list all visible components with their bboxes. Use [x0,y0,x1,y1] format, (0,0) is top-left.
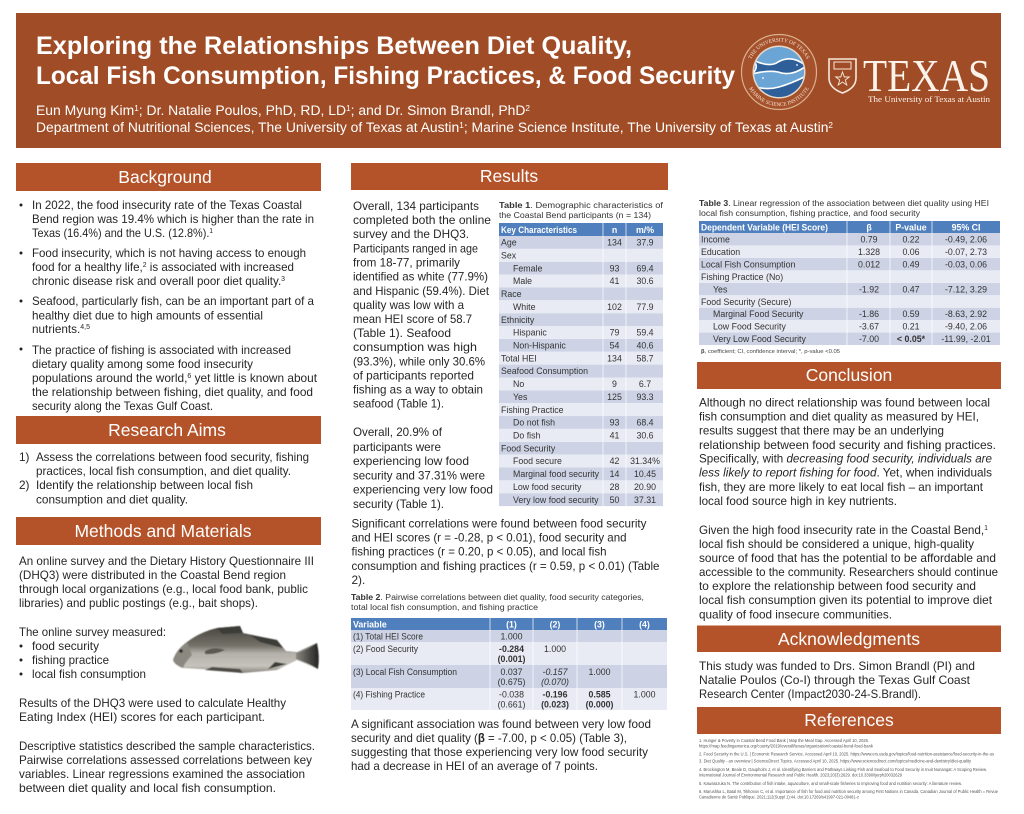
table 1: demographics: m/% [636,225,654,235]
table 3: linear regression: β [866,222,872,232]
heading: acknowledgments: Acknowledgments [778,629,920,649]
panel: references [697,707,1001,800]
table 2: pairwise correlations: -0.196 [543,690,568,700]
bullet list: background: Seafood, particularly fish, can be an important part of a [32,294,314,308]
bullet list: background: Food insecurity, which is not having access to enough [32,246,306,260]
bullet list: background: 3 [281,276,285,283]
text: participants summary: (93.3%), while only 30.6% [353,354,485,368]
text: conclusion paragraph 2: local fish consumption given its potential to improve diet [699,593,993,607]
table 3: linear regression: Yes [713,284,728,294]
list: survey measures: The online survey measured: [19,625,166,639]
table 3: linear regression: -7.12, 3.29 [945,284,987,294]
list: references: 5. Kawarazuka N. The contribution of fish intake, aquaculture, and small-scale fisheries to improving food and nutrition security: A literature review. [699,781,962,786]
bullet list: background: 4,5 [80,324,90,331]
text: funding: Natalie Poulos (Co-I) through the Texas Gulf Coast [699,673,971,687]
text: conclusion paragraph 2: source of food that has the potential to be affordable and [699,551,996,565]
text: conclusion paragraph 1: Although no direct relationship was found between local [699,396,990,410]
text: participants summary: fishing as a way to obtain [353,382,483,396]
table 3: linear regression: -0.03, 0.06 [945,259,987,269]
text: conclusion paragraph 1: relationship between food security and fishing practices. [699,438,996,452]
authors and affiliations: Eun Myung Kim [36,103,131,118]
text: significant association: security and diet quality (β = -7.00, p < 0.05) (Table 3), [351,731,627,745]
table 1: demographics: 68.4 [636,418,654,428]
bullet list: background: is associated with increased [147,260,294,274]
table 2: pairwise correlations [351,592,667,710]
bullet list: background: 1 [209,228,213,235]
table 1: demographics: 134 [607,353,622,363]
text: conclusion paragraph 2: Given the high food insecurity rate in the Coastal Bend, [699,523,988,537]
heading: background: Background [118,167,212,187]
text: participants summary: and Hispanic (59.4%). Diet [353,284,490,298]
text: significant association: A significant association was found between very low food [351,717,651,731]
table 1: demographics: Do not fish [513,418,555,428]
table 2: pairwise correlations: (1) [506,620,517,630]
table 1: demographics: 59.4 [636,328,654,338]
authors and affiliations [36,103,834,135]
table 2: pairwise correlations: (0.661) [498,700,526,710]
text: analysis: Descriptive statistics described the sample characteristics. [19,739,315,753]
table 1: demographics: Total HEI [501,353,537,363]
panel: methods and materials [16,517,321,795]
table 1: demographics: the Coastal Bend participants (n = 134) [499,210,651,220]
table 1: demographics: Seafood Consumption [501,366,588,376]
table 1: demographics: Food secure [513,456,562,466]
text: participants summary [353,199,493,511]
table 1: demographics: White [513,302,536,312]
title: Local Fish Consumption, Fishing Practices, & Food Security [36,62,735,90]
list: references: 2. Food Security in the U.S. | Economic Research Service. Accessed April 10, 2025. https://www.ers.usda.gov/topics/food-nutrition-assistance/food-security-in-the-us [699,752,995,756]
table 1: demographics: Low food security [513,482,582,492]
numbered list: aims [19,450,309,506]
text: participants summary: survey and the DHQ3. [353,227,469,241]
panel: conclusion [697,362,1001,622]
text: conclusion paragraph 2: 1 [984,525,988,532]
table 2: pairwise correlations: 0.585 [588,690,611,700]
table 1: demographics: 10.45 [634,469,656,479]
authors and affiliations: 1 [459,121,464,130]
panel: acknowledgments [697,626,1001,701]
text: funding: Research Center (Impact2030-24-S.Brandl). [699,687,921,701]
table 1: demographics: No [513,379,524,389]
table 1: demographics: 93.3 [636,392,654,402]
bullet list: background: chronic disease risk and overall poor diet quality. [32,274,286,288]
authors and affiliations: Department of Nutritional Sciences, The University of Texas at Austin [36,120,447,135]
table 1: demographics: Sex [501,250,517,260]
heading: results: Results [480,166,538,186]
text: significant association [351,717,651,773]
bullet list: background: nutrients. [32,322,81,336]
table 3: linear regression: 0.47 [902,284,920,294]
table 3: linear regression: -0.07, 2.73 [945,247,987,257]
table 2: pairwise correlations: (2) [550,620,560,630]
table 1: demographics: Race [501,289,522,299]
list: survey measures: food security [32,639,99,653]
text: significant correlations: consumption and fishing practices (r = 0.59, p < 0.01) (Table [352,559,660,573]
table 1: demographics: 37.9 [636,238,654,248]
list: references: 3. Diet Quality - an overview | ScienceDirect Topics. Accessed April 10, 2025. https://www.sciencedirect.com/topics/medicine-and-dentistry/diet-quality [699,758,972,764]
table 2: pairwise correlations: -0.157 [543,667,569,677]
authors and affiliations: 1 [134,104,139,113]
authors and affiliations: ; and Dr. Simon Brandl, PhD [351,103,526,118]
wordmark: Texas: TEXAS [863,50,990,101]
table 1: demographics: Age [501,238,517,248]
table 1: demographics: Yes [513,392,528,402]
text: participants summary: seafood (Table 1). [353,396,444,410]
table 2: pairwise correlations: (1) Total HEI Score [353,632,423,642]
list: references: 4. Brockington M, Beale D, Gaupholm J, et al. Identifying Barriers and Pathways Linking Fish and Seafood to Food Security in Inuit Nunangat: A Scoping Review. [699,767,987,772]
table 1: demographics: Marginal food security [513,469,600,479]
text: participants summary: Overall, 20.9% of [353,425,443,439]
text: conclusion paragraph 2: to explore the relationship between food security and [699,579,976,593]
wordmark: Texas: The University of Texas at Austin [868,95,991,104]
text: participants summary: quality was low with a [353,298,464,312]
text: HEI: Eating Index (HEI) scores for each participant. [19,710,265,724]
table 1: demographics: 30.6 [636,430,654,440]
table 2: pairwise correlations: (0.023) [541,700,569,710]
bullet list: background: food for a healthy life, [32,260,145,274]
numbered list: aims: Assess the correlations between food security, fishing [36,450,309,464]
list: references: https://map.feedingamerica.org/county/2019/overall/texas/organization/coastal-bend-food-bank [699,744,874,748]
text: participants summary: consumption was high [353,340,477,354]
table 1: demographics: 14 [610,469,619,479]
bullet list: background: The practice of fishing is associated with increased [32,343,291,357]
bullet list: background: In 2022, the food insecurity rate of the Texas Coastal [32,198,302,212]
table 2: pairwise correlations: 1.000 [633,690,656,700]
numbered list: aims: consumption and diet quality. [36,492,188,506]
text: survey description: through local organizations (e.g., local food bank, public [19,582,308,596]
table 1: demographics: n [612,225,617,235]
text: significant correlations: fishing practices (r = 0.20, p < 0.05), and local fish [352,544,606,558]
table 1: demographics: Do fish [513,430,540,440]
bullet list: background: Texas (16.4%) and the U.S. (12.8%). [32,226,224,240]
table 2: pairwise correlations: (0.001) [498,654,526,664]
text: funding [699,659,975,701]
table 1: demographics: 93 [610,263,619,273]
table 1: demographics: 69.4 [636,263,654,273]
table 3: linear regression: Income [701,234,730,244]
table 2: pairwise correlations: -0.038 [499,690,524,700]
text: conclusion paragraph 2: accessible to the community. Researchers should continue [699,565,998,579]
logo: Marine Science Institute [740,34,818,110]
text: participants summary: security (Table 1). [353,497,444,511]
table 1: demographics: 42 [610,456,619,466]
text: analysis: variables. Linear regressions examined the association [19,767,305,781]
table 1: demographics: 58.7 [636,353,654,363]
table 1: demographics: 102 [607,302,622,312]
table 3: linear regression: 0.59 [902,309,920,319]
header banner [16,13,1001,148]
text: participants summary: participants were [353,440,441,454]
table 2: pairwise correlations: Variable [353,620,387,630]
table 1: demographics: 134 [607,238,622,248]
list: references: Canadienne de Santé Publique. 2021;112(Suppl 1):44. doi:10.17269/s41997-021-00481-z [699,794,860,800]
heading: research aims: Research Aims [108,420,226,440]
text: significant association: had a decrease in HEI of an average of 7 points. [351,759,598,773]
table 1: demographics: 54 [610,340,619,350]
text: funding: This study was funded to Drs. Simon Brandl (PI) and [699,659,975,673]
table 2: pairwise correlations: (3) Local Fish Consumption [353,667,457,677]
table 3: linear regression: Food Security (Secure) [701,297,792,307]
table 3: linear regression: Very Low Food Security [713,334,807,344]
text: significant association: suggesting that those experiencing very low food security [351,745,648,759]
table 1: demographics: 37.31 [634,495,656,505]
text: conclusion paragraph 1: local food source high in key nutrients. [699,494,897,508]
table 3: linear regression: Fishing Practice (No) [701,272,783,282]
bullet list: background: the relationship between fishing, diet quality, and food [32,385,313,399]
table 3: linear regression: 0.79 [860,234,878,244]
text: participants summary: of participants reported [353,368,474,382]
table 3: linear regression: 0.06 [902,247,920,257]
bullet list: background: dietary quality among some food insecurity [32,357,253,371]
list: survey measures [19,625,166,681]
title [36,32,735,90]
bullet list: background: security along the Texas Gulf Coast. [32,399,213,413]
text: participants summary: mean HEI score of 58.7 [353,312,472,326]
heading: conclusion [697,362,1001,389]
table 2: pairwise correlations: 1.000 [544,644,566,654]
table 3: linear regression: Education [701,247,740,257]
table 1: demographics: Very low food security [513,495,599,505]
table 3: linear regression: Marginal Food Security [713,309,804,319]
table 3: linear regression: -9.40, 2.06 [945,322,987,332]
table 3: linear regression: Table 3. Linear regression of the association between diet quality using HEI [699,198,989,208]
table 1: demographics [499,200,664,506]
authors and affiliations: 2 [525,104,531,113]
table 2: pairwise correlations: -0.284 [499,644,524,654]
list: references: 6. Marushka L, Batal M, Tikhonov C, et al. Importance of fish for food and nutrition security among First Nations in Canada. Canadian Journal of Public Health = Revue [699,789,998,794]
table 3: linear regression: -8.63, 2.92 [945,309,987,319]
list: references [699,738,998,800]
bullet list: background: healthy diet due to high amounts of essential [32,308,263,322]
table 3: linear regression: -7.00 [859,334,879,344]
text: participants summary: experiencing low food [353,454,469,468]
text: survey description: libraries) and public postings (e.g., bait shops). [19,596,258,610]
table 3: linear regression: -3.67 [859,322,879,332]
text: participants summary: identified as white (77.9%) [353,270,488,284]
text: survey description: (DHQ3) were distributed in the Coastal Bend region [19,568,286,582]
table 2: pairwise correlations: total local fish consumption, and fishing practice [351,602,538,612]
text: survey description [19,554,314,610]
bullet list: background: Bend region was 19.4% which is higher than the rate in [32,212,314,226]
table 1: demographics: 50 [610,495,619,505]
table 3: linear regression: -11.99, -2.01 [941,334,991,344]
text: significant correlations: 2). [352,573,365,587]
table 2: pairwise correlations: (4) [639,620,650,630]
table 1: demographics: Hispanic [513,328,547,338]
heading: conclusion: Conclusion [806,365,892,385]
text: analysis: Pairwise correlations assessed correlations between key [19,753,312,767]
text: participants summary: security and 37.31% were [353,468,485,482]
logo: UT shield [829,59,856,93]
table 1: demographics: 125 [607,392,622,402]
bullet list: background: 6 [187,373,191,380]
table 2: pairwise correlations: (0.000) [586,700,614,710]
table 1: demographics: 77.9 [636,302,654,312]
table 1: demographics: 6.7 [639,379,651,389]
table 1: demographics: Key Characteristics [501,225,577,235]
table 3: linear regression: Local Fish Consumption [701,259,795,269]
table 1: demographics: Female [513,263,542,273]
text: participants summary: (Table 1). Seafood [353,326,451,340]
panel: results [351,163,1000,773]
text: conclusion paragraph 2: local fish should be considered a unique, high-quality [699,537,974,551]
text: participants summary: from 18-77, primarily [353,256,460,270]
table 1: demographics: 40.6 [636,340,654,350]
table 3: linear regression: 0.49 [902,259,920,269]
list: references: 1. Hunger & Poverty in Coastal Bend Food Bank | Map the Meal Gap. Accessed April 10, 2025. [699,738,869,743]
text: HEI [19,696,286,724]
table 2: pairwise correlations: 0.037 [500,667,523,677]
table 1: demographics: Table 1 . Demographic characteristics of [499,200,664,210]
table 1: demographics: Food Security [501,443,556,453]
table 2: pairwise correlations: (3) [594,620,605,630]
numbered list: aims: 1) [19,450,30,464]
text: participants summary: experiencing very low food [353,482,493,496]
text: HEI: Results of the DHQ3 were used to calculate Healthy [19,696,286,710]
bullet list: background: populations around the world, [32,371,187,385]
text: survey description: An online survey and the Dietary History Questionnaire III [19,554,314,568]
table 2: pairwise correlations: 1.000 [588,667,611,677]
bullet list: background [20,198,318,413]
table 3: linear regression: 1.328 [858,247,880,257]
table 3: linear regression [699,198,1000,355]
text: participants summary: Overall, 134 participants [353,199,479,213]
table 1: demographics: Fishing Practice [501,405,564,415]
table 3: linear regression: P-value [895,222,927,232]
table 1: demographics: Non-Hispanic [513,340,566,350]
heading: acknowledgments [697,626,1001,652]
text: analysis: between diet quality and local fish consumption. [19,781,276,795]
table 3: linear regression: -0.49, 2.06 [945,234,987,244]
table 3: linear regression: -1.92 [859,284,879,294]
text: significant correlations [352,516,660,587]
table 1: demographics: 31.34% [630,456,660,466]
text: conclusion paragraph 2 [699,523,998,622]
text: participants summary: Participants ranged in age [353,242,478,256]
text: conclusion paragraph 1: less likely to report fishing for food. Yet, when individuals [699,466,992,480]
table 2: pairwise correlations: (2) Food Security [353,644,419,654]
heading: background [16,163,321,191]
logo: Marine Science Institute: MARINE SCIENCE INSTITUTE [749,86,809,106]
bullet list: background: 2 [143,262,147,269]
numbered list: aims: practices, local fish consumption, and diet quality. [36,464,291,478]
numbered list: aims: Identify the relationship between local fish [36,478,253,492]
table 1: demographics: Ethnicity [501,315,535,325]
table 2: pairwise correlations: Table 2. Pairwise correlations between diet quality, food security categories, [351,592,644,602]
text: conclusion paragraph 2: quality of food insecure communities. [699,608,892,622]
authors and affiliations: 1 [346,104,351,113]
table 1: demographics: 30.6 [636,276,654,286]
table 3: linear regression: -1.86 [859,309,879,319]
text: analysis [19,739,315,795]
heading: methods: Methods and Materials [74,521,252,541]
table 2: pairwise correlations: 1.000 [500,632,523,642]
table 3: linear regression: 95% CI [952,222,980,232]
table 1: demographics: 9 [612,379,617,389]
text: conclusion paragraph 1: fish, they are more likely to eat local fish – an important [699,480,984,494]
heading: results [351,163,668,190]
text: participants summary: completed both the online [353,213,491,227]
text: conclusion paragraph 1: results suggest that there may be an underlying [699,424,944,438]
table 3: linear regression: β, coefficient; CI, confidence interval; *, p-value <0.05 [701,349,840,355]
table 3: linear regression: 0.21 [902,322,920,332]
authors and affiliations: ; Dr. Natalie Poulos, PhD, RD, LD [139,103,346,118]
table 2: pairwise correlations: (0.070) [541,677,569,687]
title: Exploring the Relationships Between Diet Quality, [36,32,632,60]
text: conclusion paragraph 1: Specifically, with decreasing food security, individuals are [699,452,992,466]
heading: references: References [804,710,894,730]
image: fish [173,626,319,673]
bullet list: background: yet little is known about [191,371,318,385]
table 3: linear regression: local fish consumption, fishing practice, and food security [699,208,921,218]
authors and affiliations: 2 [828,121,834,130]
text: conclusion paragraph 1 [699,396,996,508]
numbered list: aims: 2) [19,478,30,492]
table 2: pairwise correlations: (0.675) [498,677,526,687]
text: significant correlations: and HEI scores (r = -0.28, p < 0.01), food security and [352,530,626,544]
list: references: International Journal of Environmental Research and Public Health. 2023;20(3):2629. doi:10.3390/ijerph20032629 [699,772,902,778]
table 3: linear regression: Dependent Variable (HEI Score) [701,222,828,232]
heading: methods [16,517,321,545]
panel: research aims [16,416,321,506]
table 1: demographics: 41 [610,276,619,286]
table 1: demographics: 20.90 [634,482,656,492]
table 1: demographics: 79 [610,328,619,338]
list: survey measures: local fish consumption [32,667,146,681]
text: conclusion paragraph 1: fish consumption and diet quality as measured by HEI, [699,410,979,424]
text: significant correlations: Significant correlations were found between food security [352,516,647,530]
table 3: linear regression: 0.012 [858,259,880,269]
table 1: demographics: Male [513,276,532,286]
list: survey measures: fishing practice [32,653,109,667]
authors and affiliations: ; Marine Science Institute, The University of Texas at Austin [464,120,828,135]
heading: references [697,707,1001,734]
table 1: demographics: 28 [610,482,619,492]
panel: background [16,163,321,413]
table 1: demographics: 41 [610,430,619,440]
table 3: linear regression: 0.22 [902,234,920,244]
heading: research aims [16,416,321,444]
table 1: demographics: 93 [610,418,619,428]
table 2: pairwise correlations: (4) Fishing Practice [353,690,425,700]
table 3: linear regression: Low Food Security [713,322,786,332]
logo: Marine Science Institute: THE UNIVERSITY OF TEXAS [748,38,810,59]
table 3: linear regression: < 0.05* [897,334,926,344]
